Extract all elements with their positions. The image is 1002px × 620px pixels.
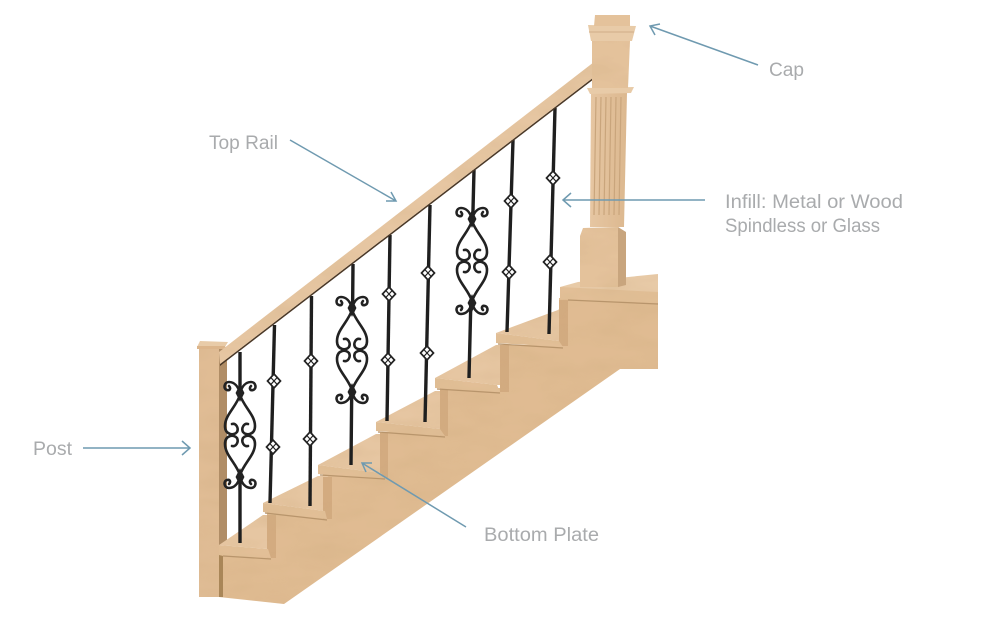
baluster 3 with knuckles: [304, 296, 318, 506]
cap top: [594, 15, 630, 26]
staircase: [219, 274, 658, 604]
label: cap: Cap: [769, 60, 804, 81]
baluster 2 with knuckles: [266, 325, 280, 503]
callout: post: [33, 439, 190, 460]
arrow: infill: [563, 193, 705, 207]
label: post: Post: [33, 439, 73, 460]
tread shadows: [223, 300, 658, 559]
stringer: [219, 298, 658, 604]
baluster 1 with scroll: [225, 352, 255, 543]
label: infill: Infill: Metal or Wood: [725, 192, 903, 213]
neck: [592, 41, 630, 88]
arrow: post: [83, 441, 190, 455]
label: bottom plate: Bottom Plate: [484, 525, 599, 546]
base block: [580, 227, 619, 287]
callout: cap: [650, 24, 804, 81]
treads: [219, 274, 658, 558]
arrow: cap: [650, 24, 758, 65]
baluster 5 with knuckles: [382, 235, 396, 421]
fluted shaft: [590, 93, 627, 227]
baluster 9 with knuckles: [544, 108, 560, 334]
label: infill second line: Spindless or Glass: [725, 216, 880, 237]
baluster 7 with scroll: [457, 170, 487, 378]
arrow: top rail: [290, 140, 396, 201]
callout: infill: [563, 192, 903, 237]
callout: bottom plate: [362, 463, 599, 546]
balusters: [225, 108, 560, 543]
starting post: [197, 341, 228, 597]
baluster 6 with knuckles: [420, 205, 434, 422]
arrow: bottom plate: [362, 463, 466, 527]
baluster 8 with knuckles: [502, 140, 518, 332]
crown: [588, 25, 636, 41]
baluster 4 with scroll: [337, 264, 367, 465]
newel post: [580, 15, 636, 287]
label: top rail: Top Rail: [209, 133, 278, 154]
collar: [587, 87, 634, 94]
top rail: [219, 62, 594, 366]
callout: top rail: [209, 133, 396, 201]
